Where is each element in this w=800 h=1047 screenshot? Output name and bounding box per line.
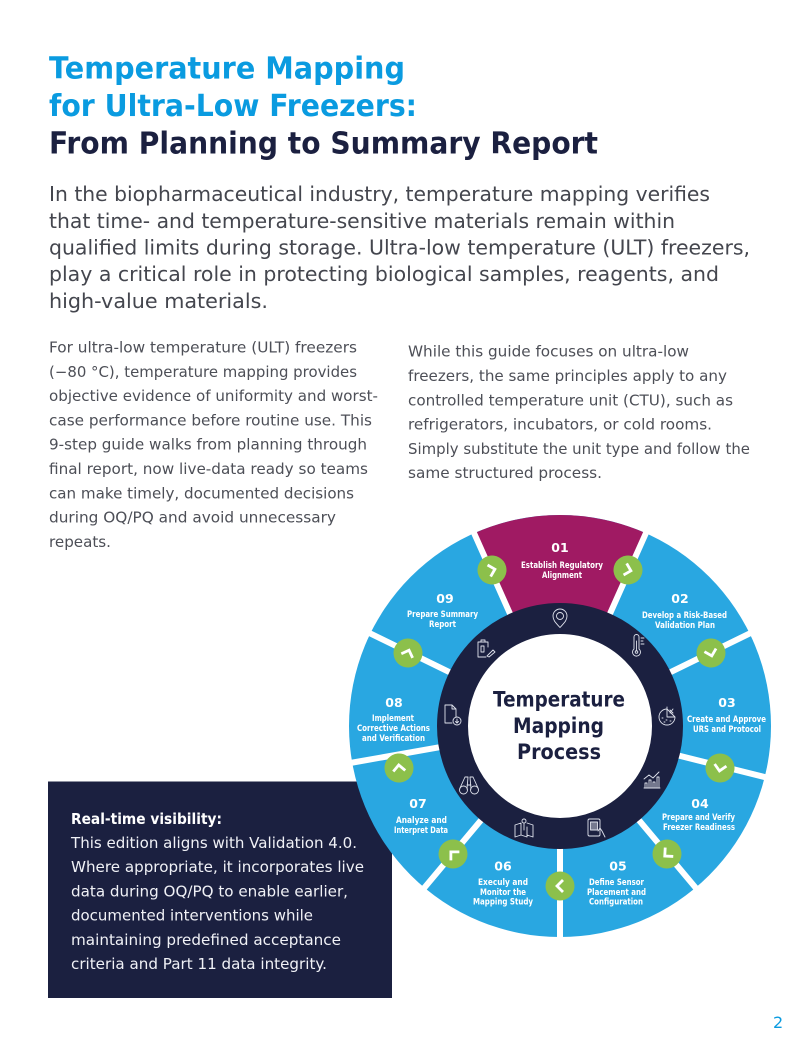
step 06: 06 — [494, 858, 512, 874]
left body text: final report, now live-data ready so teams — [49, 460, 368, 478]
callout: real-time visibility: Where appropriate, it incorporates live — [71, 858, 364, 876]
icon: thermometer — [632, 634, 644, 656]
title: From Planning to Summary Report — [49, 126, 598, 162]
step 08: 08 — [385, 695, 403, 710]
step 04 — [662, 796, 735, 833]
arrow: 02 to 03 — [693, 635, 729, 671]
intro paragraph — [49, 182, 750, 313]
step 05: Define Sensor — [589, 878, 645, 888]
step 04: Freezer Readiness — [663, 823, 735, 833]
callout: real-time visibility: data during OQ/PQ to enable earlier, — [71, 883, 348, 901]
intro paragraph: qualified limits during storage. Ultra-low temperature (ULT) freezers, — [49, 236, 750, 260]
arrow: 07 to 08 — [383, 752, 415, 784]
left body text: For ultra-low temperature (ULT) freezers — [49, 338, 357, 356]
left body text: objective evidence of uniformity and worst- — [49, 387, 378, 405]
left body text: (−80 °C), temperature mapping provides — [49, 363, 357, 381]
arrow: 06 to 07 — [432, 833, 474, 875]
step 09 — [407, 591, 478, 630]
left body text: case performance before routine use. This — [49, 411, 372, 429]
step 05: Configuration — [589, 898, 643, 908]
process wheel — [347, 515, 771, 942]
left body text — [49, 338, 378, 551]
step 08 — [357, 695, 430, 744]
right body text: refrigerators, incubators, or cold rooms. — [408, 416, 712, 434]
centre heading: Mapping — [513, 714, 604, 739]
centre heading — [493, 688, 625, 765]
step 08: Corrective Actions — [357, 724, 430, 734]
intro paragraph: play a critical role in protecting biological samples, reagents, and — [49, 262, 719, 286]
step 04: Prepare and Verify — [662, 813, 735, 823]
arrow: 05 to 06 — [546, 872, 574, 900]
arrow: 01 to 02 — [610, 552, 646, 588]
callout: real-time visibility: Real-time visibility: — [71, 810, 222, 828]
callout: real-time visibility: This edition aligns with Validation 4.0. — [70, 834, 357, 852]
left body text: 9-step guide walks from planning through — [49, 436, 367, 454]
segment separators — [347, 529, 770, 942]
callout: real-time visibility: maintaining predefined acceptance — [71, 931, 341, 949]
arrow: 08 to 09 — [389, 634, 427, 672]
step 09: Report — [429, 620, 456, 630]
step 08: Implement — [372, 714, 414, 724]
step 01: 01 — [551, 540, 569, 555]
centre ring — [452, 618, 668, 834]
intro paragraph: In the biopharmaceutical industry, temperature mapping verifies — [49, 182, 710, 206]
step 07: 07 — [409, 796, 427, 811]
icon: map with marker — [515, 819, 533, 837]
icon: petri dish — [659, 707, 675, 725]
left body text: during OQ/PQ and avoid unnecessary — [49, 508, 336, 526]
centre heading: Temperature — [493, 688, 625, 713]
arrow: 03 to 04 — [703, 751, 737, 785]
right body text: controlled temperature unit (CTU), such as — [408, 391, 733, 409]
right body text: freezers, the same principles apply to any — [408, 367, 727, 385]
icon: clipboard with pencil — [478, 640, 495, 657]
right body text: same structured process. — [408, 464, 602, 482]
callout: real-time visibility: criteria and Part 11 data integrity. — [71, 955, 327, 973]
right body text: While this guide focuses on ultra-low — [408, 343, 689, 361]
step 03: URS and Protocol — [693, 725, 761, 735]
callout: real-time visibility — [48, 782, 392, 998]
step 02 — [642, 591, 727, 631]
wheel segments — [349, 515, 771, 937]
step 03: Create and Approve — [687, 715, 766, 725]
arrow: 04 to 05 — [647, 834, 687, 874]
intro paragraph: that time- and temperature-sensitive materials remain within — [49, 209, 675, 233]
step 01 — [521, 540, 603, 581]
callout: real-time visibility: documented interventions while — [71, 907, 313, 925]
step 02: Validation Plan — [655, 621, 715, 631]
step 06 — [473, 858, 533, 908]
step 09: Prepare Summary — [407, 610, 478, 620]
icon: bar chart — [644, 772, 660, 788]
step 01: Alignment — [542, 571, 582, 581]
step 01: Establish Regulatory — [521, 561, 603, 571]
step 05 — [587, 858, 646, 908]
step 05: Placement and — [587, 888, 646, 898]
icon: location pin — [553, 609, 567, 628]
icon: document with download — [445, 705, 461, 725]
step 09: 09 — [436, 591, 454, 606]
centre heading: Process — [517, 740, 601, 765]
arrow: 09 to 01 — [474, 552, 510, 588]
icon: binoculars — [460, 777, 478, 794]
left body text: repeats. — [49, 533, 111, 551]
title: Temperature Mapping — [49, 52, 405, 86]
icon: tablet with hand — [588, 819, 605, 837]
intro paragraph: high-value materials. — [49, 289, 268, 313]
step 05: 05 — [609, 858, 627, 874]
step 03: 03 — [718, 695, 736, 710]
title: for Ultra-Low Freezers: — [49, 89, 417, 124]
step 07 — [394, 796, 448, 836]
step 06: Execuly and — [478, 878, 528, 888]
step 02: Develop a Risk-Based — [642, 611, 727, 621]
step 02: 02 — [671, 591, 689, 606]
step 06: Mapping Study — [473, 898, 533, 908]
title — [49, 52, 598, 162]
right body text: Simply substitute the unit type and follow the — [408, 440, 750, 458]
step 08: and Verification — [362, 734, 425, 744]
step 06: Monitor the — [480, 888, 526, 898]
left body text: can make timely, documented decisions — [49, 484, 354, 502]
step 04: 04 — [691, 796, 709, 811]
step 07: Interpret Data — [394, 826, 448, 836]
step 07: Analyze and — [396, 816, 447, 826]
step 03 — [687, 695, 766, 735]
right body text — [408, 343, 750, 482]
page number: 2 — [773, 1013, 783, 1032]
